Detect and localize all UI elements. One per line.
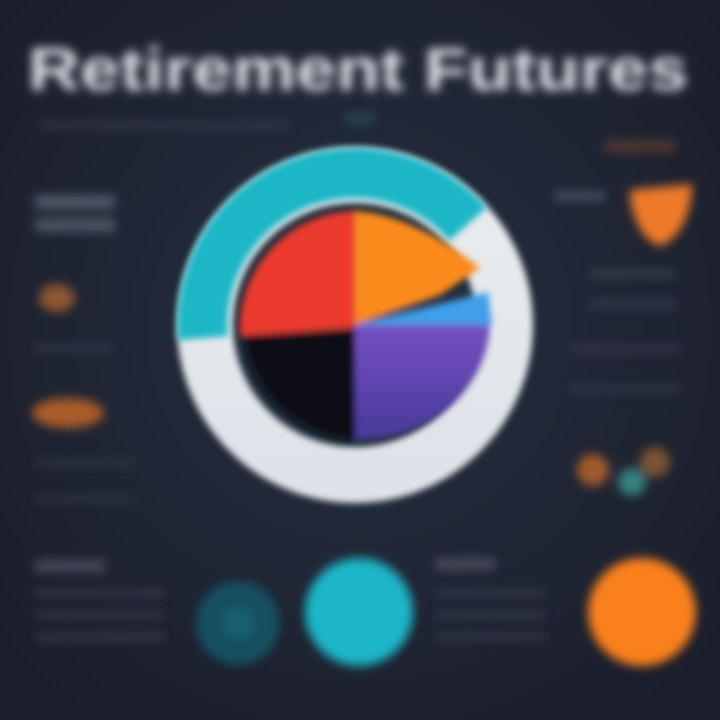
icon: orange circle [588,558,696,666]
label block [35,195,115,209]
title: Retirement Futures [28,36,688,103]
icon: orange shield [630,184,692,246]
pie: purple wedge [355,325,490,440]
orange label [32,398,104,428]
subtitle [40,112,675,152]
pie: orange wedge [355,211,480,325]
pie: red wedge [240,211,355,336]
icon: dark teal circle [196,581,280,665]
donut ring: white [205,175,505,475]
donut ring: teal arc [202,173,468,338]
right column [555,184,692,496]
left column labels [32,195,135,501]
icon: teal circle [305,558,413,666]
pie: blue wedge [355,292,492,325]
pie chart [240,211,492,440]
bottom text blocks [35,558,545,640]
icons: small coloured dots [577,454,609,486]
pie: dark wedge [244,330,355,440]
orange marker [39,284,75,312]
donut chart [202,173,505,475]
